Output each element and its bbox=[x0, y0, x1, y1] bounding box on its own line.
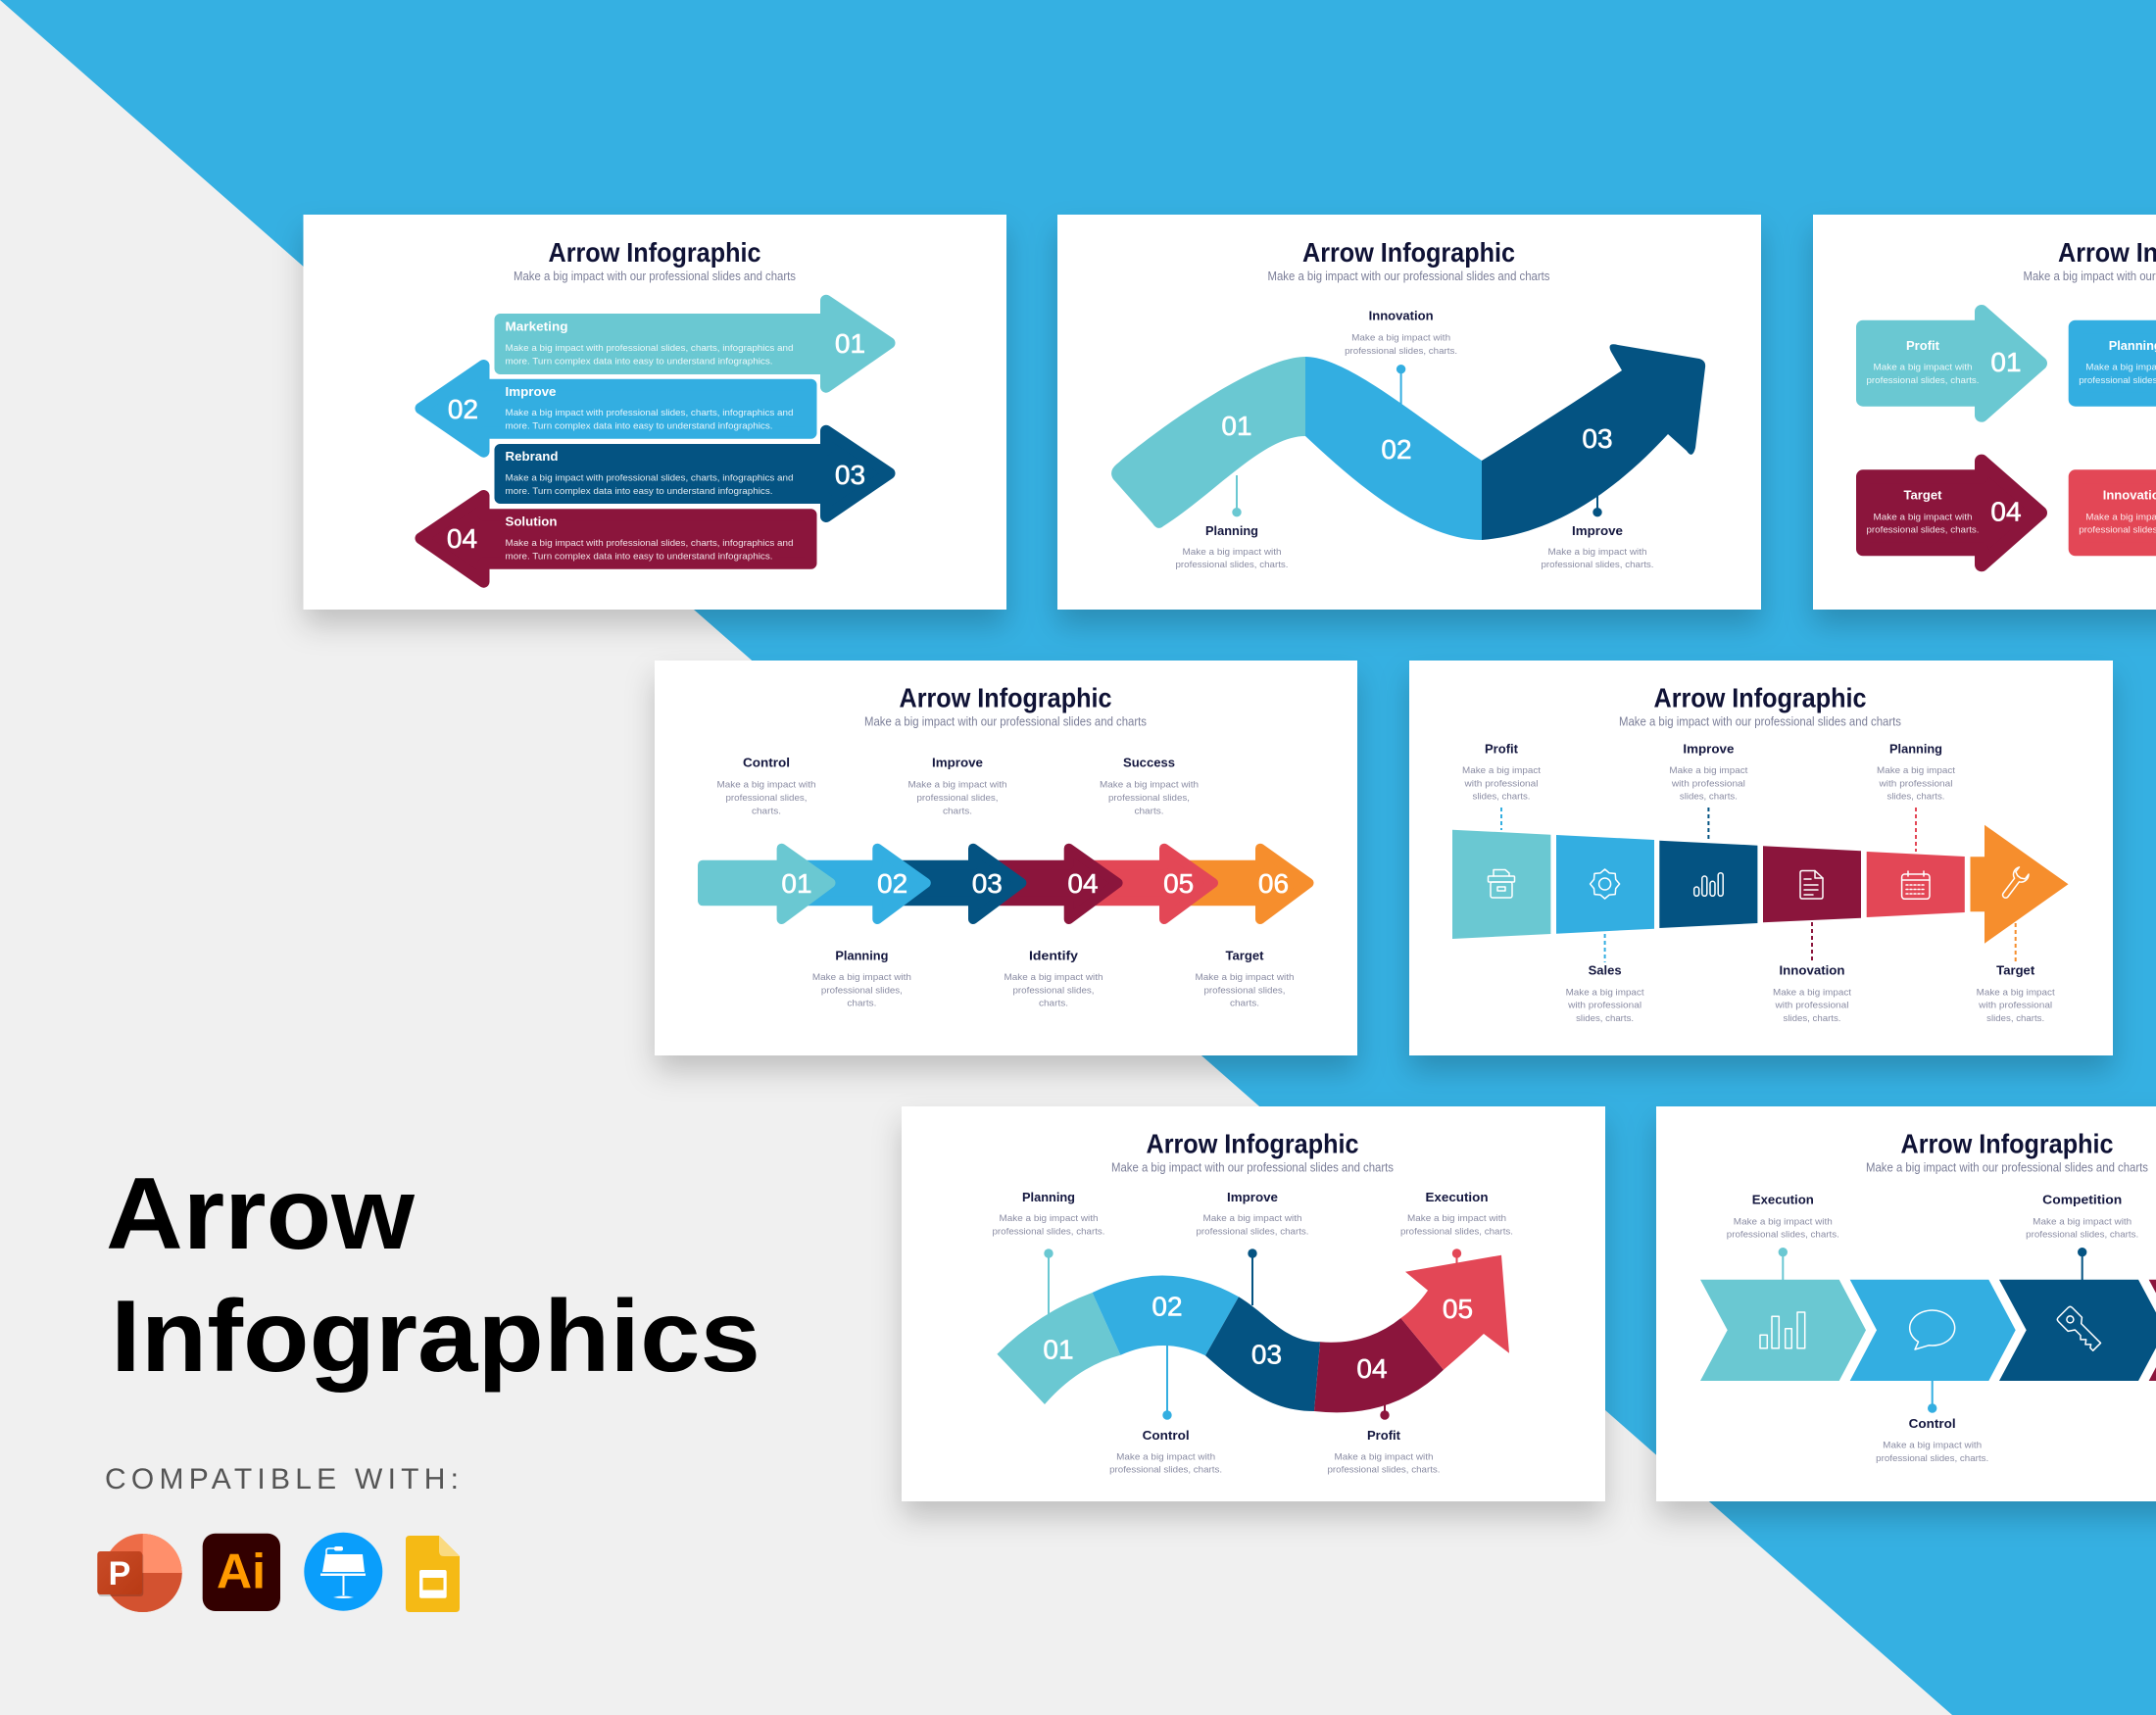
label: Planning: professional slides, charts. bbox=[1176, 560, 1288, 570]
arrow 04 Solution: Solution bbox=[506, 514, 558, 529]
label: Control: Control bbox=[1909, 1416, 1956, 1431]
icon: wrench bbox=[1998, 866, 2030, 902]
label: Improve bbox=[1196, 1190, 1309, 1237]
label: Control: Make a big impact with bbox=[1883, 1441, 1982, 1451]
number 01: 01 bbox=[1221, 411, 1252, 441]
label: Planning: slides, charts. bbox=[1887, 792, 1944, 803]
panel: curved five-step arrow slide bbox=[902, 1106, 1605, 1501]
arrow box: Profit: Profit bbox=[1906, 338, 1940, 353]
icon: Illustrator bbox=[203, 1534, 280, 1611]
step numbers: 03 bbox=[1251, 1340, 1282, 1370]
segment 04 bbox=[1314, 1318, 1444, 1412]
segment 03 bbox=[1205, 1297, 1320, 1411]
title bbox=[106, 1157, 760, 1394]
icon: bars bbox=[1694, 873, 1723, 896]
arrow 02 Improve: 02 bbox=[448, 394, 478, 424]
connector: Planning bbox=[1044, 1249, 1054, 1316]
label: Control bbox=[1876, 1416, 1988, 1464]
label: Target: charts. bbox=[1230, 999, 1259, 1009]
label: Execution: Execution bbox=[1425, 1190, 1489, 1204]
number 02: 02 bbox=[1381, 434, 1412, 465]
icon: Google Slides bbox=[406, 1536, 460, 1612]
segment: navy bbox=[1659, 841, 1757, 928]
label: Planning bbox=[1176, 523, 1288, 570]
label: Planning: Planning bbox=[1889, 741, 1942, 756]
step numbers: 02 bbox=[877, 868, 907, 899]
subheading: Make a big impact with our professional slides and charts bbox=[1111, 1161, 1394, 1175]
arrow box: Target: professional slides, charts. bbox=[1866, 525, 1980, 536]
connector: Execution bbox=[1452, 1249, 1461, 1265]
label: Execution: Make a big impact with bbox=[1407, 1213, 1506, 1224]
panel: wave arrow slide bbox=[1057, 215, 1761, 610]
arrow 01 Marketing: 01 bbox=[835, 328, 865, 359]
arrow 03 Rebrand: Make a big impact with professional slides, charts, infographics and bbox=[506, 473, 794, 484]
label: Improve: Make a big impact with bbox=[907, 780, 1007, 791]
label: Planning: professional slides, charts. bbox=[992, 1226, 1105, 1237]
label: Competition: Make a big impact with bbox=[2033, 1216, 2132, 1227]
connector: Improve bbox=[1248, 1249, 1257, 1305]
label: Planning: Planning bbox=[1205, 523, 1258, 538]
arrow box: Target: Target bbox=[1903, 488, 1942, 503]
label: Planning: Make a big impact with bbox=[1000, 1213, 1098, 1224]
connector: Improve bbox=[1592, 481, 1602, 516]
label: Improve: professional slides, bbox=[917, 793, 998, 804]
segment 03 arrow head bbox=[1482, 344, 1705, 540]
label: Innovation bbox=[1345, 309, 1457, 357]
arrow box: Profit bbox=[1863, 312, 2040, 416]
arrow box: Target: Make a big impact with bbox=[1874, 512, 1972, 522]
heading: Arrow Infographic bbox=[1147, 1129, 1358, 1159]
label: Innovation: Innovation bbox=[1780, 963, 1845, 978]
icon: PowerPoint: P bbox=[109, 1555, 130, 1592]
heading: Arrow Infographic bbox=[1901, 1129, 2113, 1159]
label: Target: with professional bbox=[1978, 1001, 2052, 1011]
label: Control bbox=[717, 756, 815, 816]
label: Planning: Planning bbox=[1022, 1190, 1075, 1204]
connector: Profit bbox=[1380, 1400, 1390, 1420]
arrow 02 Improve: Improve bbox=[506, 384, 557, 399]
label: Improve: Improve bbox=[1572, 523, 1623, 538]
arrow box: Target bbox=[1863, 462, 2040, 564]
segment: orange arrow head bbox=[1970, 825, 2068, 944]
label: Identify: Identify bbox=[1029, 948, 1079, 962]
subheading: Make a big impact with our professional slides and charts bbox=[1268, 270, 1550, 283]
step numbers: 04 bbox=[1067, 868, 1099, 899]
panel: chevron process slide (cropped) bbox=[1656, 1106, 2156, 1501]
segment 01 bbox=[1111, 357, 1305, 528]
label: Competition: professional slides, charts. bbox=[2026, 1230, 2138, 1241]
label: Profit: professional slides, charts. bbox=[1327, 1465, 1441, 1476]
connector: Control bbox=[1928, 1381, 1936, 1413]
label: Execution: Execution bbox=[1752, 1192, 1814, 1206]
label: Improve: charts. bbox=[943, 806, 972, 816]
connector: Competition bbox=[2078, 1248, 2086, 1280]
label: Sales bbox=[1566, 963, 1644, 1024]
label: Target: professional slides, bbox=[1203, 985, 1286, 996]
label: Control: Make a big impact with bbox=[717, 780, 815, 791]
panel: six-step arrow chain slide bbox=[655, 661, 1357, 1055]
label: Improve: professional slides, charts. bbox=[1541, 560, 1654, 570]
label: Improve bbox=[907, 756, 1007, 816]
segment 01 bbox=[997, 1293, 1120, 1404]
label: Planning: charts. bbox=[847, 999, 876, 1009]
arrow 02 Improve: Make a big impact with professional slides, charts, infographics and bbox=[506, 408, 794, 418]
label: Target: Make a big impact with bbox=[1196, 972, 1294, 983]
label: Profit: slides, charts. bbox=[1472, 792, 1531, 803]
icon: calendar bbox=[1902, 871, 1930, 899]
label: Profit: with professional bbox=[1463, 778, 1539, 789]
label: Improve bbox=[1669, 741, 1748, 803]
subheading: Make a big impact with our professional slides and charts bbox=[1619, 715, 1901, 729]
label: Improve: slides, charts. bbox=[1680, 792, 1738, 803]
label: Control bbox=[1109, 1428, 1222, 1476]
label: Success: Make a big impact with bbox=[1100, 780, 1199, 791]
arrow box: Target: 04 bbox=[1990, 497, 2022, 527]
arrow 01 Marketing: Make a big impact with professional slides, charts, infographics and bbox=[506, 343, 794, 354]
connector: Planning bbox=[1232, 475, 1242, 516]
heading: Arrow Infographic bbox=[549, 237, 760, 268]
step numbers: 06 bbox=[1258, 868, 1289, 899]
arrow 06 bbox=[1164, 849, 1309, 919]
label: Improve: Make a big impact bbox=[1669, 765, 1748, 776]
arrow 01 Marketing bbox=[500, 301, 890, 387]
arrow 01 Marketing: Marketing bbox=[506, 319, 568, 334]
label: Innovation: Make a big impact bbox=[1773, 987, 1851, 998]
label: Identify: Make a big impact with bbox=[1004, 972, 1103, 983]
label: Planning: Make a big impact bbox=[1877, 765, 1955, 776]
icon: Keynote bbox=[304, 1533, 382, 1611]
subheading: Make a big impact with our professional slides and charts bbox=[864, 715, 1147, 729]
arrow box: Profit: professional slides, charts. bbox=[1866, 375, 1980, 386]
step numbers: 05 bbox=[1163, 868, 1194, 899]
label: Innovation: Innovation bbox=[1369, 309, 1434, 323]
panel: stacked arrows slide bbox=[304, 215, 1006, 610]
label: Profit: Profit bbox=[1367, 1428, 1401, 1443]
step numbers: 04 bbox=[1356, 1353, 1388, 1384]
label: Sales: slides, charts. bbox=[1576, 1013, 1634, 1024]
label: Planning: Make a big impact with bbox=[812, 972, 911, 983]
icon: speech bubble bbox=[1910, 1310, 1955, 1349]
arrow 03 Rebrand: 03 bbox=[835, 460, 865, 490]
label: Success: charts. bbox=[1135, 806, 1164, 816]
subheading: Make a big impact with our professional slides and charts bbox=[514, 270, 796, 283]
label: Planning: professional slides, bbox=[821, 985, 903, 996]
label: Improve: Improve bbox=[932, 756, 983, 770]
step numbers bbox=[781, 868, 1289, 899]
label: Control: Make a big impact with bbox=[1116, 1451, 1215, 1462]
icon: document bbox=[1800, 870, 1823, 899]
arrow 03 Rebrand: Rebrand bbox=[506, 449, 559, 464]
label: Improve: with professional bbox=[1671, 778, 1745, 789]
arrow 04 Solution: more. Turn complex data into easy to understand infographics. bbox=[506, 551, 772, 562]
heading: Arrow Infographic bbox=[1654, 683, 1866, 713]
connector: Innovation bbox=[1396, 365, 1405, 407]
label: Improve bbox=[1541, 523, 1654, 570]
title: Arrow bbox=[106, 1157, 416, 1271]
dashed leader lines bbox=[1501, 808, 2016, 962]
label: Target: slides, charts. bbox=[1986, 1013, 2044, 1024]
label: Control: professional slides, charts. bbox=[1109, 1465, 1222, 1476]
arrow box: Innovation bbox=[2076, 462, 2156, 564]
chevron 3 bbox=[1999, 1280, 2156, 1381]
icon: key bbox=[2056, 1305, 2104, 1353]
label: Innovation: Make a big impact with bbox=[1351, 333, 1450, 344]
label: Target: Target bbox=[1225, 948, 1264, 962]
label: Target bbox=[1977, 963, 2055, 1024]
label: Control: professional slides, bbox=[725, 793, 808, 804]
label: Profit bbox=[1327, 1428, 1441, 1476]
step numbers: 02 bbox=[1152, 1292, 1183, 1322]
number 03: 03 bbox=[1582, 423, 1613, 454]
label: Innovation bbox=[1773, 963, 1851, 1024]
label: Innovation: slides, charts. bbox=[1784, 1013, 1840, 1024]
segment 05 arrow head bbox=[1400, 1255, 1509, 1370]
label: Innovation: professional slides, charts. bbox=[1345, 346, 1457, 357]
label: Planning bbox=[992, 1190, 1105, 1237]
connector: Execution bbox=[1779, 1248, 1788, 1280]
label: Execution: professional slides, charts. bbox=[1400, 1226, 1513, 1237]
label: Sales: Make a big impact bbox=[1566, 987, 1644, 998]
arrow 01 bbox=[703, 849, 831, 919]
label: Improve: professional slides, charts. bbox=[1196, 1226, 1309, 1237]
label: Sales: Sales bbox=[1589, 963, 1622, 978]
arrow 03 Rebrand: more. Turn complex data into easy to understand infographics. bbox=[506, 486, 772, 497]
chevron 4 bbox=[2149, 1280, 2156, 1381]
label: Success: Success bbox=[1123, 756, 1175, 770]
segment 02 bbox=[1093, 1276, 1239, 1355]
label: Sales: with professional bbox=[1567, 1001, 1642, 1011]
label: Innovation: with professional bbox=[1774, 1001, 1848, 1011]
arrow 02 Improve bbox=[421, 366, 811, 452]
arrow 03 bbox=[880, 849, 1021, 919]
title: Infographics bbox=[111, 1280, 760, 1394]
label: Identify bbox=[1004, 948, 1103, 1009]
label: Profit: Profit bbox=[1485, 741, 1519, 756]
step numbers: 05 bbox=[1443, 1294, 1473, 1324]
arrow box: Profit: Make a big impact with bbox=[1874, 363, 1972, 373]
label: Planning bbox=[1877, 741, 1955, 803]
label: Identify: professional slides, bbox=[1013, 985, 1094, 996]
arrow 04 Solution bbox=[421, 496, 811, 582]
label: Planning bbox=[812, 948, 911, 1009]
label: Planning: with professional bbox=[1878, 778, 1952, 789]
step numbers: 01 bbox=[781, 868, 812, 899]
label: Success bbox=[1100, 756, 1199, 816]
label: Execution: Make a big impact with bbox=[1734, 1216, 1833, 1227]
label: Target: Make a big impact bbox=[1977, 987, 2055, 998]
arrow 03 Rebrand bbox=[500, 431, 890, 516]
chevron 2 bbox=[1850, 1280, 2016, 1381]
panel: tapered arrow slide bbox=[1409, 661, 2113, 1055]
label: Control: professional slides, charts. bbox=[1876, 1453, 1988, 1464]
heading: Arrow Infographic bbox=[900, 683, 1111, 713]
label: Improve: Make a big impact with bbox=[1548, 547, 1646, 558]
connector: Control bbox=[1162, 1345, 1172, 1420]
label: Profit bbox=[1462, 741, 1541, 803]
step numbers: 03 bbox=[972, 868, 1003, 899]
label: Planning: Make a big impact with bbox=[1182, 547, 1282, 558]
segment: maroon bbox=[1763, 846, 1861, 922]
label: Profit: Make a big impact with bbox=[1335, 1451, 1433, 1462]
segment: blue bbox=[1556, 835, 1654, 934]
label: Success: professional slides, bbox=[1108, 793, 1190, 804]
label: Execution bbox=[1400, 1190, 1513, 1237]
arrow 01 Marketing: more. Turn complex data into easy to understand infographics. bbox=[506, 356, 772, 367]
chevron 1 bbox=[1700, 1280, 1866, 1381]
arrow 04 Solution: 04 bbox=[447, 523, 477, 554]
label: Execution bbox=[1727, 1192, 1839, 1241]
label: Profit: Make a big impact bbox=[1462, 765, 1541, 776]
label: Control: charts. bbox=[752, 806, 781, 816]
segment: red bbox=[1867, 852, 1965, 917]
arrow 02 Improve: more. Turn complex data into easy to understand infographics. bbox=[506, 421, 772, 432]
label: Improve: Make a big impact with bbox=[1203, 1213, 1301, 1224]
arrow 02 bbox=[782, 849, 926, 919]
label: Planning: Planning bbox=[835, 948, 888, 962]
icon: PowerPoint bbox=[97, 1534, 182, 1612]
label: Control: Control bbox=[1143, 1428, 1190, 1443]
arrow 05 bbox=[1076, 849, 1213, 919]
label: Control: Control bbox=[743, 756, 790, 770]
label: Improve: Improve bbox=[1683, 741, 1734, 756]
panel: arrow boxes slide (cropped) bbox=[1813, 215, 2156, 610]
heading: Arrow Infographic bbox=[1302, 237, 1515, 268]
arrow box: Planning bbox=[2076, 312, 2156, 416]
segment: teal bbox=[1452, 830, 1550, 939]
label: Execution: professional slides, charts. bbox=[1727, 1230, 1839, 1241]
label: Competition bbox=[2026, 1192, 2138, 1241]
step numbers: 01 bbox=[1043, 1335, 1074, 1365]
icon: gear bbox=[1591, 869, 1620, 899]
label: Target: Target bbox=[1996, 963, 2035, 978]
icon: archive box bbox=[1488, 870, 1515, 898]
label: Competition: Competition bbox=[2042, 1192, 2122, 1206]
step numbers bbox=[1043, 1292, 1473, 1384]
icon: bars bbox=[1760, 1312, 1805, 1348]
arrow 04 Solution: Make a big impact with professional slides, charts, infographics and bbox=[506, 538, 794, 549]
label: Target bbox=[1196, 948, 1294, 1009]
label: Identify: charts. bbox=[1039, 999, 1068, 1009]
icon: Illustrator: Ai bbox=[217, 1544, 266, 1599]
arrow box: Profit: 01 bbox=[1990, 347, 2022, 377]
label: Improve: Improve bbox=[1227, 1190, 1278, 1204]
compatible with heading: COMPATIBLE WITH: bbox=[105, 1463, 459, 1495]
arrow 04 bbox=[978, 849, 1118, 919]
segment 02 bbox=[1305, 357, 1482, 540]
